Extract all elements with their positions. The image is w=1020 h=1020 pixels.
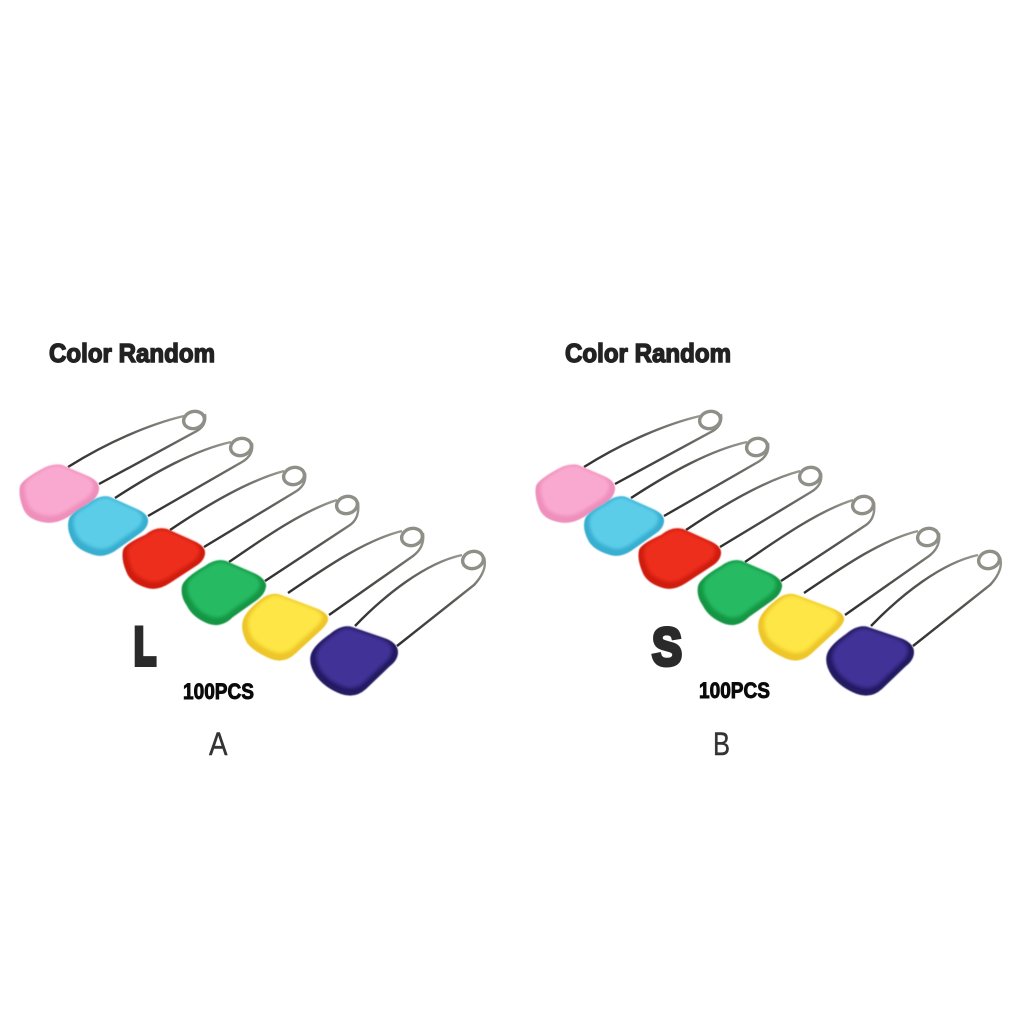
- option letter A: A: [209, 726, 228, 762]
- quantity A: 100PCS: [183, 679, 254, 704]
- quantity B: 100PCS: [699, 678, 770, 703]
- option letter B: B: [713, 726, 730, 762]
- heading: color random B: Color Random: [565, 338, 731, 368]
- panel: option B: [535, 338, 1001, 762]
- safety pins A: [19, 409, 485, 696]
- size label S: S: [652, 618, 682, 677]
- size label L: L: [134, 618, 156, 676]
- panel: option A: [19, 338, 485, 762]
- heading: color random A: Color Random: [49, 338, 215, 368]
- safety pins B: [535, 409, 1001, 696]
